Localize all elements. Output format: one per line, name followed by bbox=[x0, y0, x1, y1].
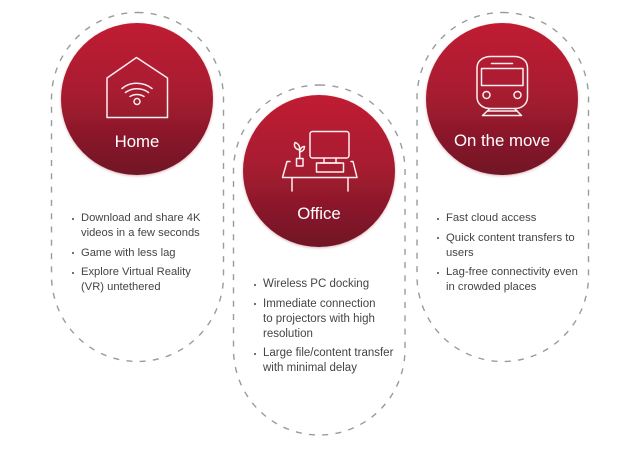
text block: on the move bullets bbox=[437, 212, 578, 293]
panel: on the move badge bbox=[426, 23, 578, 175]
icon: desk with monitor and plant bbox=[282, 132, 357, 191]
text block: office bullets: to projectors with high bbox=[263, 313, 375, 325]
text block: office bullets: Large file/content transfer bbox=[263, 347, 393, 359]
dashed pill: office bbox=[234, 85, 405, 435]
text block: home bullets bbox=[72, 212, 200, 293]
dashed pill: on the move bbox=[417, 12, 588, 362]
text block: office bullets: Immediate connection bbox=[263, 298, 376, 310]
text block: home bullets: videos in a few seconds bbox=[81, 227, 200, 239]
text block: on the move bullets: Fast cloud access bbox=[446, 212, 536, 224]
heading: On the move: On the move bbox=[454, 131, 550, 150]
panel: home badge bbox=[61, 23, 213, 175]
heading: Home: Home bbox=[115, 132, 159, 151]
text block: on the move bullets: users bbox=[446, 247, 474, 259]
heading: Office: Office bbox=[297, 204, 341, 223]
panel: office badge bbox=[243, 95, 395, 247]
text block: home bullets: Explore Virtual Reality bbox=[81, 266, 191, 278]
text block: home bullets: Game with less lag bbox=[81, 247, 176, 259]
text block: office bullets: resolution bbox=[263, 328, 313, 340]
text block: on the move bullets: in crowded places bbox=[446, 281, 536, 293]
text block: home bullets: Download and share 4K bbox=[81, 212, 200, 224]
icon: house with wifi bbox=[107, 58, 168, 118]
text block: home bullets: (VR) untethered bbox=[81, 281, 161, 293]
text block: office bullets: with minimal delay bbox=[263, 362, 357, 374]
text block: on the move bullets: Quick content transfers to bbox=[446, 232, 575, 244]
text block: office bullets: Wireless PC docking bbox=[263, 278, 369, 290]
text block: on the move bullets: Lag-free connectivity even bbox=[446, 266, 578, 278]
text block: office bullets bbox=[254, 278, 394, 374]
icon: train bbox=[477, 56, 528, 116]
dashed pill: home bbox=[52, 12, 224, 362]
